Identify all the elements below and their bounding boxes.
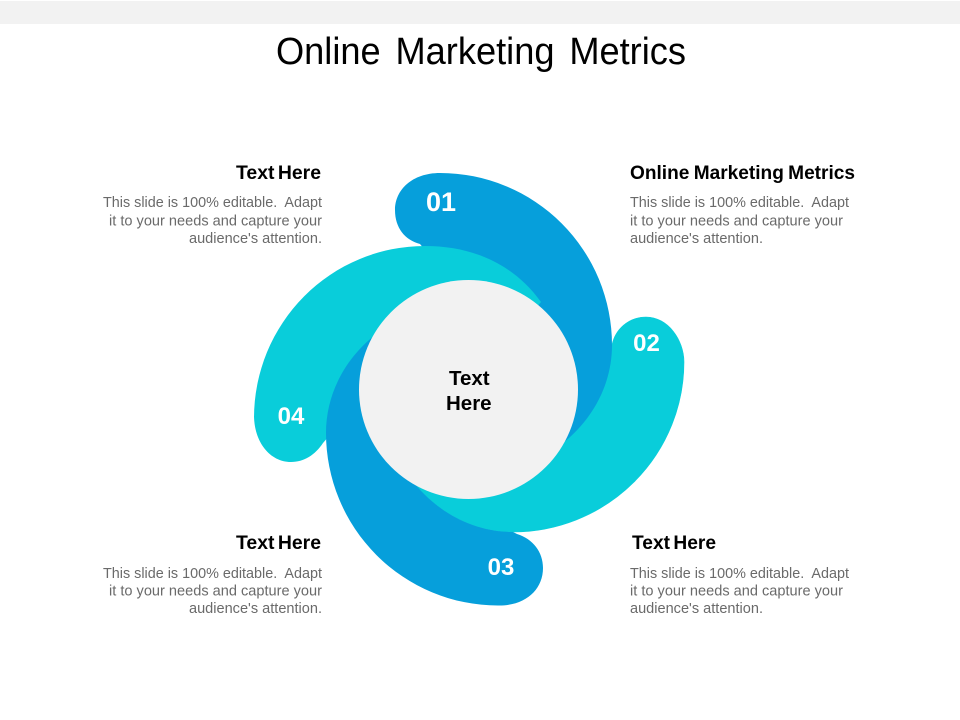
text block: bottom left: Text Here bbox=[236, 532, 321, 554]
text block: bottom right: it to your needs and capture your bbox=[630, 582, 843, 600]
segment 02: 02 bbox=[633, 330, 660, 357]
text block: top left: Text Here bbox=[236, 162, 321, 184]
text block: top left bbox=[103, 162, 323, 247]
text block: top right: Online Marketing Metrics bbox=[630, 162, 855, 184]
segment 02 bbox=[415, 317, 684, 532]
segment 03: 03 bbox=[488, 554, 514, 581]
segment 01: 01 bbox=[426, 187, 456, 217]
text block: bottom right: This slide is 100% editable. Adapt bbox=[630, 565, 850, 582]
top band bbox=[0, 1, 960, 24]
text block: top left: it to your needs and capture your bbox=[109, 212, 322, 230]
text block: bottom left: This slide is 100% editable. Adapt bbox=[103, 565, 323, 582]
segment 04: 04 bbox=[278, 403, 305, 430]
text block: bottom left bbox=[103, 532, 323, 617]
segment 01 bbox=[395, 173, 612, 443]
text block: top left: This slide is 100% editable. Adapt bbox=[103, 194, 323, 211]
text block: top left: audience's attention. bbox=[189, 230, 322, 247]
segment 04 bbox=[254, 246, 541, 462]
text block: bottom right: Text Here bbox=[632, 532, 716, 554]
text block: bottom right: audience's attention. bbox=[630, 600, 763, 617]
text block: bottom right bbox=[630, 532, 850, 617]
text block: bottom left: audience's attention. bbox=[189, 600, 322, 617]
text block: top right bbox=[630, 162, 855, 247]
text block: top right: audience's attention. bbox=[630, 230, 763, 247]
text block: top right: This slide is 100% editable. Adapt bbox=[630, 194, 850, 211]
text block: top right: it to your needs and capture your bbox=[630, 212, 843, 230]
center label: Here bbox=[446, 392, 492, 415]
segment 03 bbox=[326, 335, 543, 606]
center label: Text bbox=[449, 367, 490, 390]
title: Online Marketing Metrics bbox=[276, 31, 686, 73]
center circle bbox=[359, 280, 578, 499]
text block: bottom left: it to your needs and capture your bbox=[109, 582, 322, 600]
